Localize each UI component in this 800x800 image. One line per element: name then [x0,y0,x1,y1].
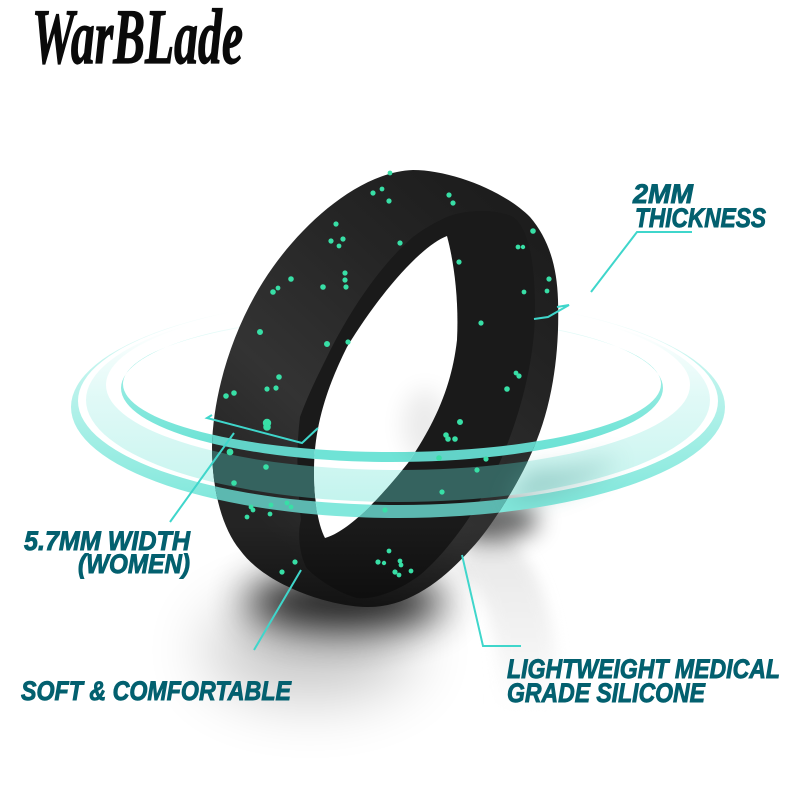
label: SOFT & COMFORTABLE [21,676,292,706]
measure bracket [207,415,318,443]
sparkle dots [224,171,551,577]
ring: soft middle band [86,298,710,502]
faint shadow inside the hole [402,392,442,453]
callout: 2mm thickness: THICKNESS [635,203,766,233]
silicone ring [212,170,558,607]
ring outer face [212,170,558,607]
callout: soft and comfortable [21,570,301,706]
callout: medical grade silicone [462,555,780,708]
label: 2MM [632,179,694,209]
callout: 5.7mm width: (WOMEN) [78,549,190,579]
callout: 5.7mm width [24,415,318,579]
bands passing in front of the ring [212,434,614,518]
measure bracket [534,305,569,319]
soft band through hole [314,466,402,502]
leader line [254,570,301,650]
hole through the ring [314,236,458,538]
rings behind the band [71,296,725,518]
ring lower darkening [220,447,534,607]
soft band over ring [212,450,528,502]
soft teal glow right of ring [505,456,620,504]
callout: 2mm thickness [534,179,766,319]
leader line [591,232,692,292]
ring inner surface [297,211,535,598]
inner swoosh over ring [212,434,536,462]
outer swoosh over ring [215,486,508,518]
callout: medical grade silicone: GRADE SILICONE [507,678,706,708]
ring: inner thin swoosh [121,314,663,462]
inner swoosh through hole [314,449,416,462]
floor shadow and reflection [205,500,538,710]
ring: outer swoosh [71,296,725,518]
leader line [462,555,521,646]
leader line [170,433,234,522]
label: 5.7MM WIDTH [24,526,190,556]
outer swoosh through hole [316,502,372,518]
